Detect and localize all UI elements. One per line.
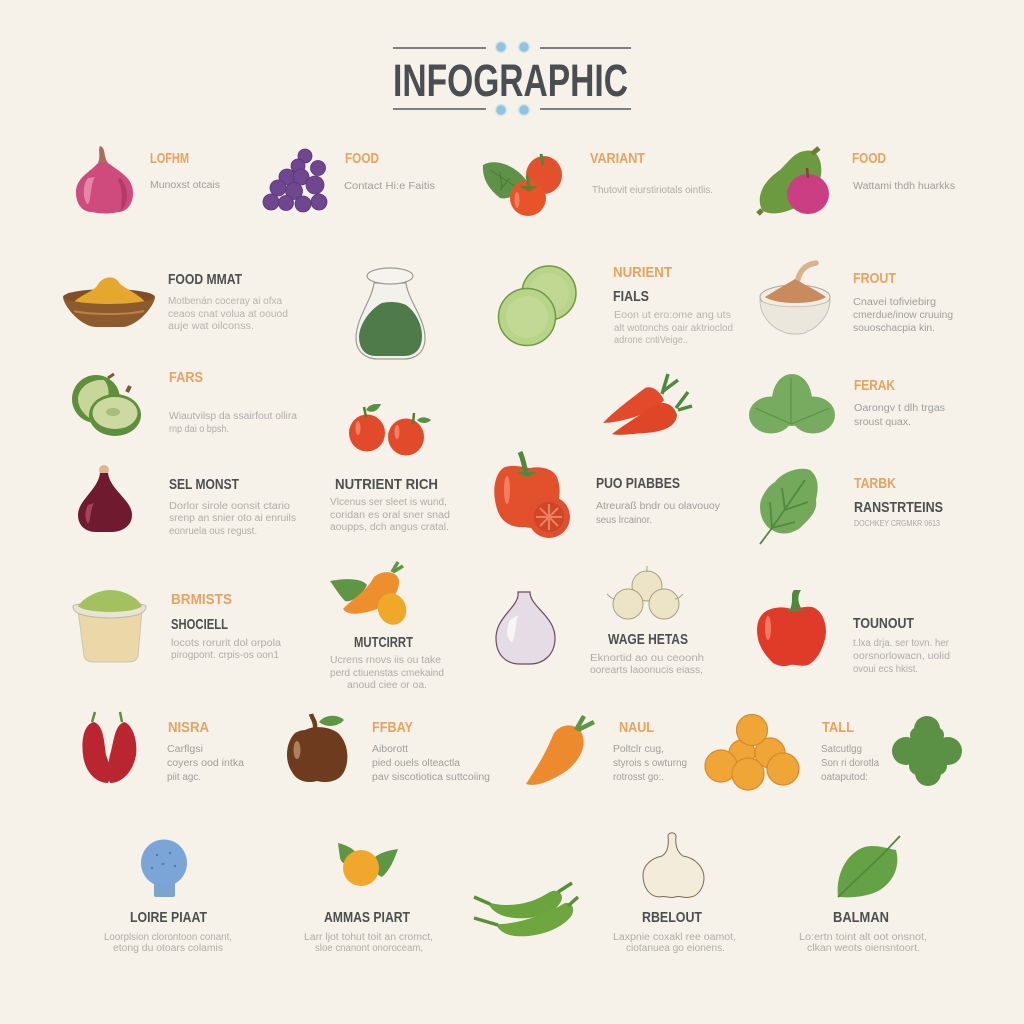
- description: pirogpont. crpis-os oon1: [171, 650, 279, 661]
- panel: carrots with leaf: [330, 562, 444, 691]
- description: auje wat oilconss.: [168, 321, 254, 332]
- panel: bowl with spoon: [760, 263, 953, 334]
- description: ciotanuea go eionens.: [626, 943, 725, 954]
- description: [613, 744, 687, 783]
- description: rotrosst go:.: [613, 772, 664, 783]
- icon: bowl with spoon: [760, 263, 830, 334]
- description: Dorlor sirole oonsit ctario: [169, 501, 290, 512]
- description: Contact Hi:e Faitis: [344, 181, 435, 192]
- description: [596, 501, 720, 526]
- heading: FERAK: [854, 377, 895, 394]
- subheading: RANSTRTEINS: [854, 499, 943, 516]
- description: [853, 297, 953, 334]
- description: Larr ljot tohut toit an cromct,: [304, 932, 433, 943]
- heading: TOUNOUT: [853, 615, 914, 632]
- description: eonruela ous regust.: [169, 526, 257, 537]
- heading: FOOD: [852, 150, 886, 167]
- icon: red chili peppers: [603, 374, 692, 435]
- subheading: SHOCIELL: [171, 616, 228, 633]
- panel: dark fig: [78, 465, 296, 537]
- description: clkan weots oiensntoort.: [807, 943, 920, 954]
- icon: tomatoes with leaf: [483, 154, 562, 216]
- icon: cucumber slices: [498, 266, 576, 346]
- description: pied ouels olteactla: [372, 758, 460, 769]
- panel: green figs: [72, 369, 297, 436]
- heading: FROUT: [853, 270, 896, 287]
- panel: squash and plum: [758, 148, 955, 214]
- panel: garlic: [496, 592, 555, 664]
- description: [854, 403, 945, 428]
- description: oataputod:: [821, 772, 868, 783]
- title: INFOGRAPHIC: [393, 55, 628, 106]
- heading: FOOD: [345, 150, 379, 167]
- description: Carflgsi: [167, 744, 203, 755]
- heading: LOFHM: [150, 150, 189, 167]
- icon: dark fig: [78, 465, 132, 532]
- heading: FOOD MMAT: [168, 271, 242, 288]
- icon: brown apple: [287, 714, 347, 782]
- heading: NISRA: [168, 719, 209, 736]
- panel: parsley: [892, 716, 962, 786]
- description: seus lrcainor.: [596, 515, 652, 526]
- description: Wattami thdh huarkks: [853, 181, 955, 192]
- description: styrois s owturng: [613, 758, 687, 769]
- description: t.lxa drja. ser tovn. her: [853, 638, 950, 649]
- panel: orange with leaves: [304, 843, 433, 954]
- description: [590, 653, 704, 676]
- description: [167, 744, 244, 783]
- heading: NAUL: [619, 719, 654, 736]
- description: [799, 932, 927, 954]
- panel: carrot: [526, 716, 687, 785]
- description: aoupps, dch angus cratal.: [330, 522, 449, 533]
- subheading: FIALS: [613, 288, 649, 305]
- title: [393, 42, 631, 116]
- description: Laxpnie coxakl ree oamot,: [613, 932, 736, 943]
- heading: AMMAS PIART: [324, 909, 410, 926]
- description: Cnavei tofiviebirg: [853, 297, 936, 308]
- icon: red bell pepper: [757, 590, 826, 666]
- description: Munoxst otcais: [150, 180, 220, 191]
- icon: carrot: [526, 716, 594, 785]
- description: Ucrens rnovs iis ou take: [330, 655, 441, 666]
- description: [330, 655, 444, 691]
- description: [372, 744, 490, 783]
- panel: pink onion: [76, 146, 220, 214]
- description: Loorplsion clorontoon conant,: [104, 932, 232, 943]
- description: Lo:ertn toint alt oot onsnot,: [799, 932, 927, 943]
- description: ceaos cnat volua at oouod: [168, 309, 288, 320]
- icon: green peppers: [474, 883, 578, 936]
- heading: WAGE HETAS: [608, 631, 688, 648]
- description: souoschacpia kin.: [853, 323, 935, 334]
- panel: leaf trio: [749, 374, 945, 434]
- description: Vlcenus ser sleet is wund,: [330, 497, 447, 508]
- icon: red pepper with slice: [494, 452, 570, 538]
- heading: NUTRIENT RICH: [335, 476, 438, 493]
- description: [168, 296, 288, 332]
- icon: red chilies: [82, 712, 136, 783]
- icon: white garlic: [643, 833, 704, 898]
- description: [330, 497, 450, 533]
- description: coridan es oral sner snad: [330, 510, 450, 521]
- heading: TALL: [822, 719, 854, 736]
- panel: blue bulb: [104, 840, 232, 954]
- panel: red chili peppers: [603, 374, 692, 435]
- icon: green leaf: [838, 836, 900, 897]
- icon: red apples: [349, 404, 431, 456]
- description: Aiborott: [372, 744, 408, 755]
- icon: parsley: [892, 716, 962, 786]
- description: cmerdue/inow cruuing: [853, 310, 953, 321]
- description: sroust quax.: [854, 417, 911, 428]
- panel: nutrient rich text: [330, 476, 450, 533]
- description: srenp an snier oto ai enruils: [169, 513, 296, 524]
- description: Eoon ut ero:ome ang uts: [614, 310, 731, 321]
- panel: red chilies: [82, 712, 244, 783]
- heading: LOIRE PIAAT: [130, 909, 207, 926]
- panel: red bell pepper: [757, 590, 950, 675]
- heading: TARBK: [854, 475, 896, 492]
- panel: cucumber slices: [498, 264, 733, 346]
- panel: cup of green grain: [73, 590, 281, 662]
- description: [169, 411, 297, 435]
- description: rnp dai o bpsh.: [169, 424, 229, 435]
- panel: white garlic: [613, 833, 736, 954]
- panel: spinach leaf: [760, 469, 943, 544]
- panel: brown apple: [287, 714, 490, 783]
- description: Wiautvilsp da ssairfout ollira: [169, 411, 297, 422]
- icon: orange rounds: [705, 714, 799, 790]
- description: ovoui ecs hkist.: [853, 664, 918, 675]
- description: pav siscotiotica suttcoiing: [372, 772, 490, 783]
- panel: grapes: [263, 149, 435, 212]
- panel: red apples: [349, 404, 431, 456]
- description: [613, 932, 736, 954]
- heading: FFBAY: [372, 719, 413, 736]
- description: Son ri dorotla: [821, 758, 879, 769]
- description: DOCHKEY CRGMKR 0613: [854, 519, 940, 528]
- icon: squash and plum: [758, 148, 829, 214]
- icon: pink onion: [76, 146, 133, 214]
- description: etong du otoars colamis: [113, 943, 223, 954]
- description: [304, 932, 433, 954]
- heading: NURIENT: [613, 264, 672, 281]
- description: locots rorurit dol orpola: [171, 638, 281, 649]
- description: anoud ciee or oa.: [347, 680, 427, 691]
- description: alt wotonchs oair aktrioclod: [614, 323, 733, 334]
- icon: garlic: [496, 592, 555, 664]
- description: oorsnorlowacn, uolid: [853, 651, 950, 662]
- icon: three onions: [607, 566, 683, 619]
- icon: green figs: [72, 374, 141, 436]
- icon: cup of green grain: [73, 590, 146, 662]
- icon: glass jar: [356, 268, 425, 359]
- icon: bowl of grain: [63, 277, 155, 327]
- description: Poltclr cug,: [613, 744, 664, 755]
- description: perd ctiuenstas cmekaind: [330, 668, 444, 679]
- description: Atreuraß bndr ou olavouoy: [596, 501, 720, 512]
- description: Thutovit eiurstiriotals ointlis.: [592, 185, 713, 196]
- heading: PUO PIABBES: [596, 475, 680, 492]
- heading: SEL MONST: [169, 476, 239, 493]
- description: [821, 744, 879, 783]
- panel: green leaf: [799, 836, 927, 954]
- icon: blue bulb: [141, 840, 187, 897]
- heading: VARIANT: [590, 150, 645, 167]
- description: adrone cntiVeige..: [614, 335, 688, 346]
- icon: carrots with leaf: [330, 562, 411, 629]
- description: Oarongv t dlh trgas: [854, 403, 945, 414]
- heading: BRMISTS: [171, 591, 232, 608]
- icon: leaf trio: [749, 374, 835, 434]
- description: piit agc.: [167, 772, 201, 783]
- description: [104, 932, 232, 954]
- description: coyers ood intka: [167, 758, 244, 769]
- description: [171, 638, 281, 661]
- heading: RBELOUT: [642, 909, 702, 926]
- panel: green peppers: [474, 883, 578, 936]
- heading: FARS: [169, 369, 203, 386]
- heading: BALMAN: [833, 909, 889, 926]
- panel: three onions: [590, 566, 704, 676]
- panel: tomatoes with leaf: [483, 150, 713, 216]
- panel: red pepper with slice: [494, 452, 720, 538]
- heading: MUTCIRRT: [354, 634, 413, 651]
- icon: spinach leaf: [760, 469, 818, 544]
- description: [169, 501, 296, 537]
- description: sloe cnanont onoroceam,: [315, 943, 423, 954]
- description: oorearts laoonucis eiass,: [590, 665, 703, 676]
- description: Satcutlgg: [821, 744, 862, 755]
- description: [853, 638, 950, 675]
- icon: orange with leaves: [338, 843, 398, 886]
- description: [614, 310, 733, 346]
- panel: orange rounds: [705, 714, 879, 790]
- panel: glass jar: [356, 268, 425, 359]
- description: Motbenán coceray ai ofxa: [168, 296, 282, 307]
- description: Eknortid ao ou ceoonh: [590, 653, 704, 664]
- panel: bowl of grain: [63, 271, 288, 332]
- icon: grapes: [263, 149, 327, 212]
